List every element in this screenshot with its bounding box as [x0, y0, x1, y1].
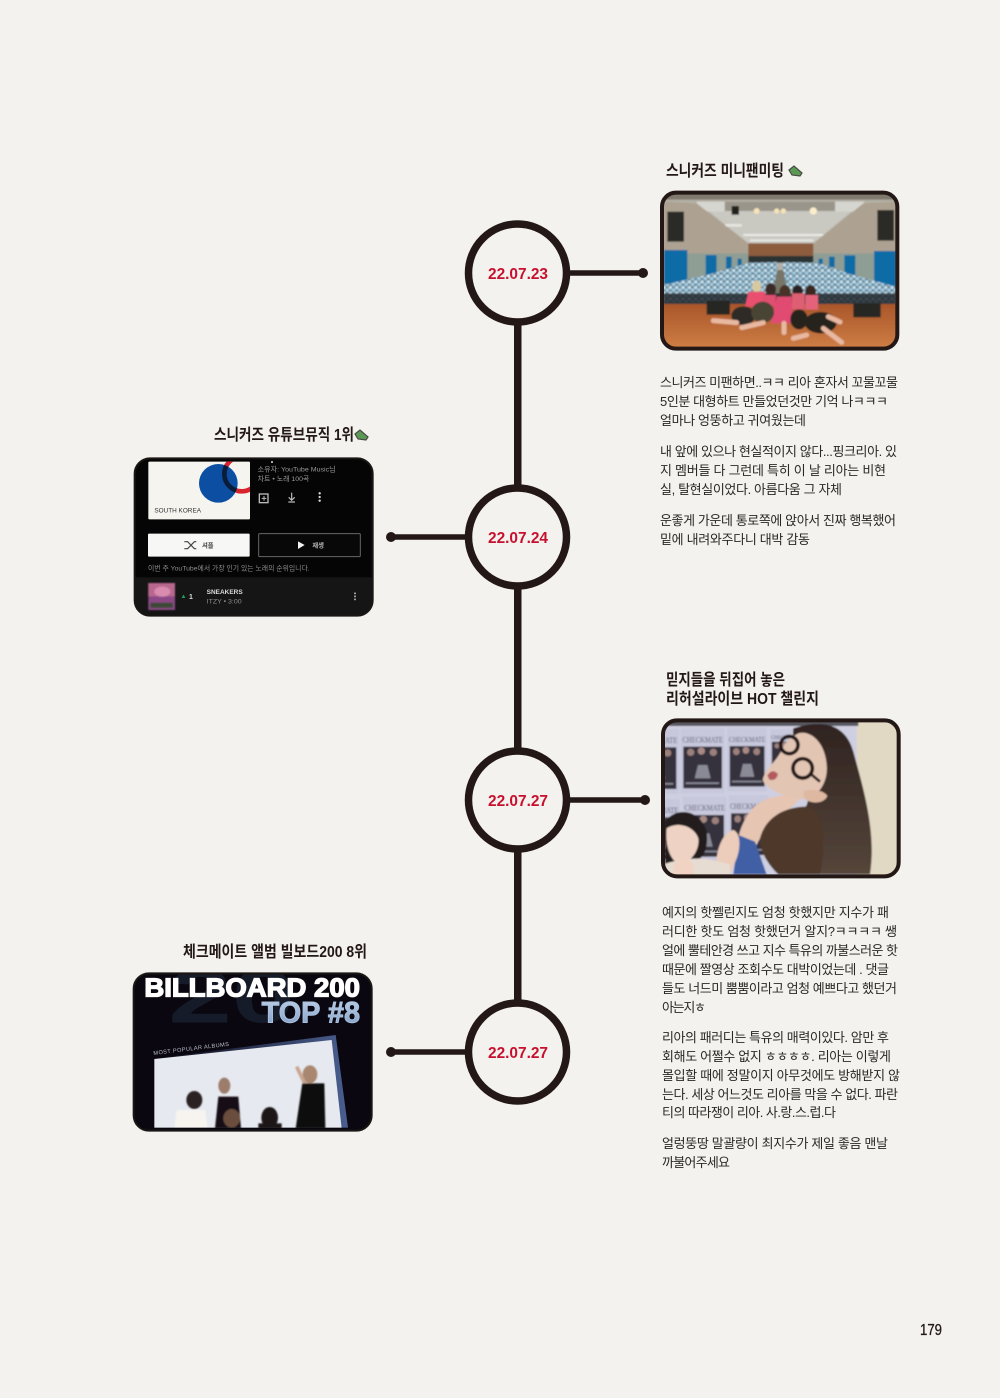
album cover: south korea	[148, 462, 250, 520]
node 22.07.27 lower: 22.07.27	[488, 1045, 548, 1062]
node 22.07.27 upper	[468, 751, 650, 849]
text block: challenge commentary: 들도 너드미 뿜뿜이라고 엄청 예쁘다고 했던거	[662, 981, 897, 996]
page number: 179	[920, 1322, 942, 1339]
text block: challenge commentary: 는다. 세상 어느것도 리아를 막을 수 없다. 파란	[662, 1087, 898, 1102]
text block: challenge commentary	[662, 905, 900, 1170]
text block: challenge commentary: 얼에 뿔테안경 쓰고 지수 특유의 까불스러운 핫	[662, 943, 898, 958]
node 22.07.24: 22.07.24	[488, 530, 548, 547]
album photo	[152, 1035, 349, 1135]
heading: rehearsal live hot challenge	[666, 671, 819, 708]
track row: sneakers: 1	[189, 594, 193, 601]
woman bottom left	[662, 812, 730, 877]
heading: mini fan meeting: 스니커즈 미니팬미팅	[666, 162, 784, 180]
top 8 title: TOP #8	[262, 996, 360, 1029]
heading: rehearsal live hot challenge: 믿지들을 뒤집어 놓은	[666, 671, 785, 689]
text block: fan meeting memories: 실, 탈현실이었다. 아름다움 그 자체	[660, 482, 842, 497]
panel: billboard 200 top 8 graphic	[132, 972, 373, 1132]
timeline spine	[514, 320, 522, 1010]
album cover: south korea: SOUTH KOREA	[154, 509, 201, 515]
shuffle button	[148, 534, 250, 557]
playlist info	[258, 461, 336, 503]
album photo: MOST POPULAR ALBUMS	[153, 1042, 230, 1057]
photo: challenge video still	[635, 719, 900, 877]
text block: challenge commentary: 예지의 핫쩰린지도 엄청 핫했지만 지수가 패	[662, 905, 889, 920]
node 22.07.23	[468, 224, 648, 322]
text block: challenge commentary: 러디한 핫도 엄청 핫했던거 알지?ㅋㅋㅋㅋ 쌩	[662, 924, 897, 939]
track row: sneakers: SNEAKERS	[207, 589, 243, 596]
text block: challenge commentary: 때문에 짤영상 조회수도 대박이었는데 . 댓글	[662, 962, 889, 977]
shuffle button: 셔플	[202, 540, 214, 549]
text block: fan meeting memories: 밑에 내려와주다니 대박 감동	[660, 532, 810, 547]
node 22.07.24	[386, 488, 566, 586]
faded backdrop numerals: 20	[168, 954, 295, 1039]
play button: 재생	[312, 540, 324, 549]
text block: challenge commentary: 아는지ㅎ	[662, 1000, 706, 1015]
text block: fan meeting memories: 5인분 대형하트 만들었던것만 기억 나ㅋㅋㅋ	[660, 394, 888, 409]
track row: sneakers	[148, 583, 356, 610]
text block: challenge commentary: 까불어주세요	[662, 1155, 730, 1170]
node 22.07.27 lower	[386, 1003, 566, 1101]
text block: fan meeting memories	[660, 375, 898, 547]
woman with glasses	[738, 724, 872, 874]
performers on stage	[713, 281, 842, 342]
text block: challenge commentary: 얼렁뚱땅 말괄량이 최지수가 제일 좋음 맨날	[662, 1136, 888, 1151]
billboard 200 title: BILLBOARD 200	[144, 973, 360, 1003]
play button	[259, 534, 360, 557]
node 22.07.27 upper: 22.07.27	[488, 793, 548, 810]
playlist info: 소유자: YouTube Music님	[258, 464, 336, 473]
heading: youtube music no.1: 스니커즈 유튜브뮤직 1위	[214, 426, 354, 444]
text block: challenge commentary: 티의 따라쟁이 리아. 사.랑.스.럽.다	[662, 1105, 836, 1120]
timeline	[386, 224, 650, 1101]
track row: sneakers: ITZY • 3:00	[207, 599, 242, 606]
photo: fan meeting hall	[661, 192, 898, 350]
chart description: 이번 주 YouTube에서 가장 인기 있는 노래의 순위입니다.	[148, 564, 310, 573]
text block: challenge commentary: 몰입할 때에 정말이지 아무것에도 방해받지 않	[662, 1068, 900, 1083]
text block: fan meeting memories: 얼마나 엉뚱하고 귀여웠는데	[660, 413, 806, 428]
text block: fan meeting memories: 스니커즈 미팬하면..ㅋㅋ 리아 혼자서 꼬물꼬물	[660, 375, 898, 390]
heading: billboard 200: 체크메이트 앨범 빌보드200 8위	[183, 943, 367, 961]
node 22.07.23: 22.07.23	[488, 266, 548, 283]
text block: fan meeting memories: 지 멤버들 다 그런데 특히 이 날 리아는 비현	[660, 463, 886, 478]
playlist info: 차트 • 노래 100곡	[258, 474, 309, 483]
text block: fan meeting memories: 내 앞에 있으나 현실적이지 않다...핑크리아. 있	[660, 444, 897, 459]
text block: challenge commentary: 회해도 어쩔수 없지 ㅎㅎㅎㅎ. 리아는 이렇게	[662, 1049, 891, 1064]
panel: youtube music chart screenshot	[134, 457, 374, 617]
person in blue top	[717, 807, 823, 874]
text block: fan meeting memories: 운좋게 가운데 통로쪽에 앉아서 진짜 행복했어	[660, 513, 896, 528]
text block: challenge commentary: 리아의 패러디는 특유의 매력이있다. 암만 후	[662, 1030, 889, 1045]
heading: rehearsal live hot challenge: 리허설라이브 HOT 챌린지	[666, 690, 819, 708]
